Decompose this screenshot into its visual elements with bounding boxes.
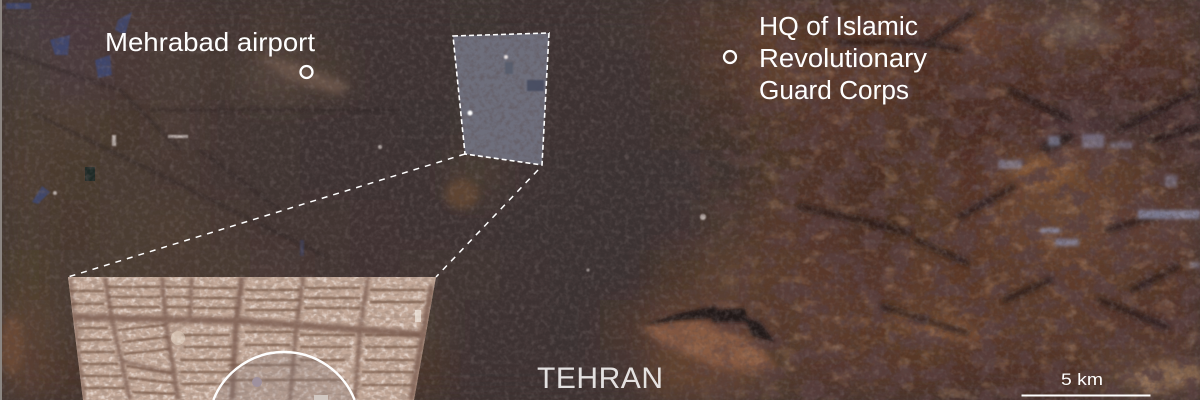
inset block texture xyxy=(70,287,425,394)
bright urban specks xyxy=(53,135,706,272)
label: HQ of Islamic Revolutionary Guard Corps xyxy=(759,13,927,105)
zoom connector lines xyxy=(68,154,538,277)
snow patches xyxy=(998,134,1200,268)
zoomed inset image xyxy=(68,277,436,400)
inset circle highlight xyxy=(213,352,355,400)
label: TEHRAN: TEHRAN xyxy=(537,362,663,395)
label: Mehrabad airport: Mehrabad airport xyxy=(105,27,316,57)
dark ridges xyxy=(800,13,1200,333)
inset circle tint xyxy=(213,352,355,400)
highlighted selection area xyxy=(450,30,550,170)
blue patches west xyxy=(6,3,304,256)
scale bar: 5 km: 5 km xyxy=(1061,370,1103,389)
scale bar: 5 km xyxy=(1022,370,1150,396)
western roads xyxy=(0,50,400,257)
mountain ridge texture xyxy=(672,0,1200,400)
label: HQ of Islamic Revolutionary Guard Corps: Guard Corps xyxy=(759,77,909,105)
label: HQ of Islamic Revolutionary Guard Corps: HQ of Islamic xyxy=(759,13,918,41)
marker: IRGC HQ xyxy=(724,51,736,63)
inset main streets xyxy=(70,277,432,400)
marker: Mehrabad airport xyxy=(300,66,312,78)
label: HQ of Islamic Revolutionary Guard Corps: Revolutionary xyxy=(759,45,927,73)
inset pale spots xyxy=(171,331,185,345)
cliff shadow xyxy=(642,306,775,342)
